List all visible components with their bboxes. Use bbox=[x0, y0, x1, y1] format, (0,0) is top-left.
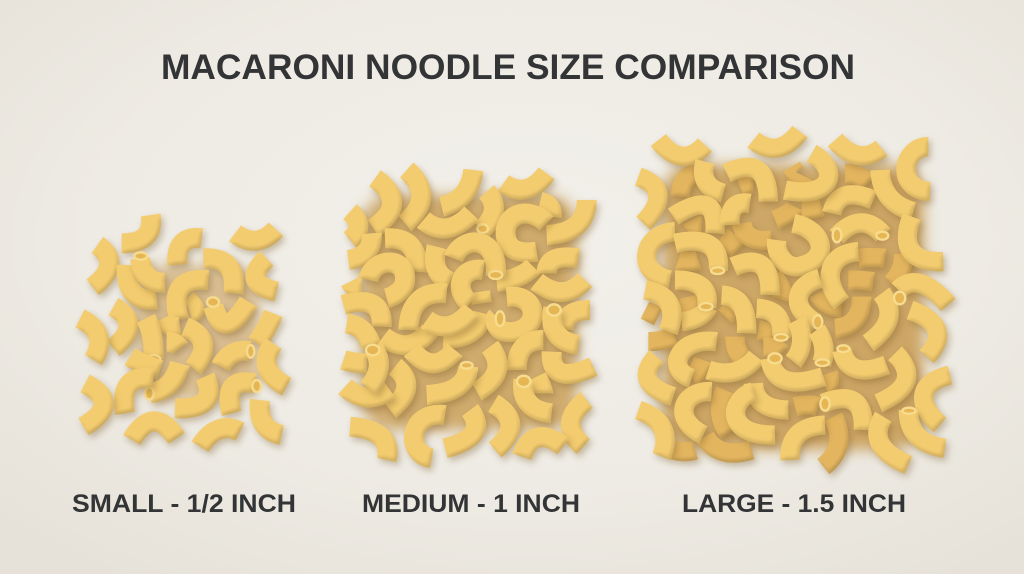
label: small: SMALL - 1/2 INCH bbox=[72, 490, 296, 518]
small macaroni cluster bbox=[80, 215, 287, 447]
label: medium: MEDIUM - 1 INCH bbox=[362, 490, 580, 518]
cluster backing shadows bbox=[135, 165, 924, 450]
large macaroni cluster bbox=[638, 132, 950, 467]
label: large: LARGE - 1.5 INCH bbox=[682, 490, 906, 518]
background noodles bbox=[645, 167, 904, 467]
title: MACARONI NOODLE SIZE COMPARISON bbox=[161, 48, 855, 87]
medium macaroni cluster bbox=[343, 170, 593, 460]
